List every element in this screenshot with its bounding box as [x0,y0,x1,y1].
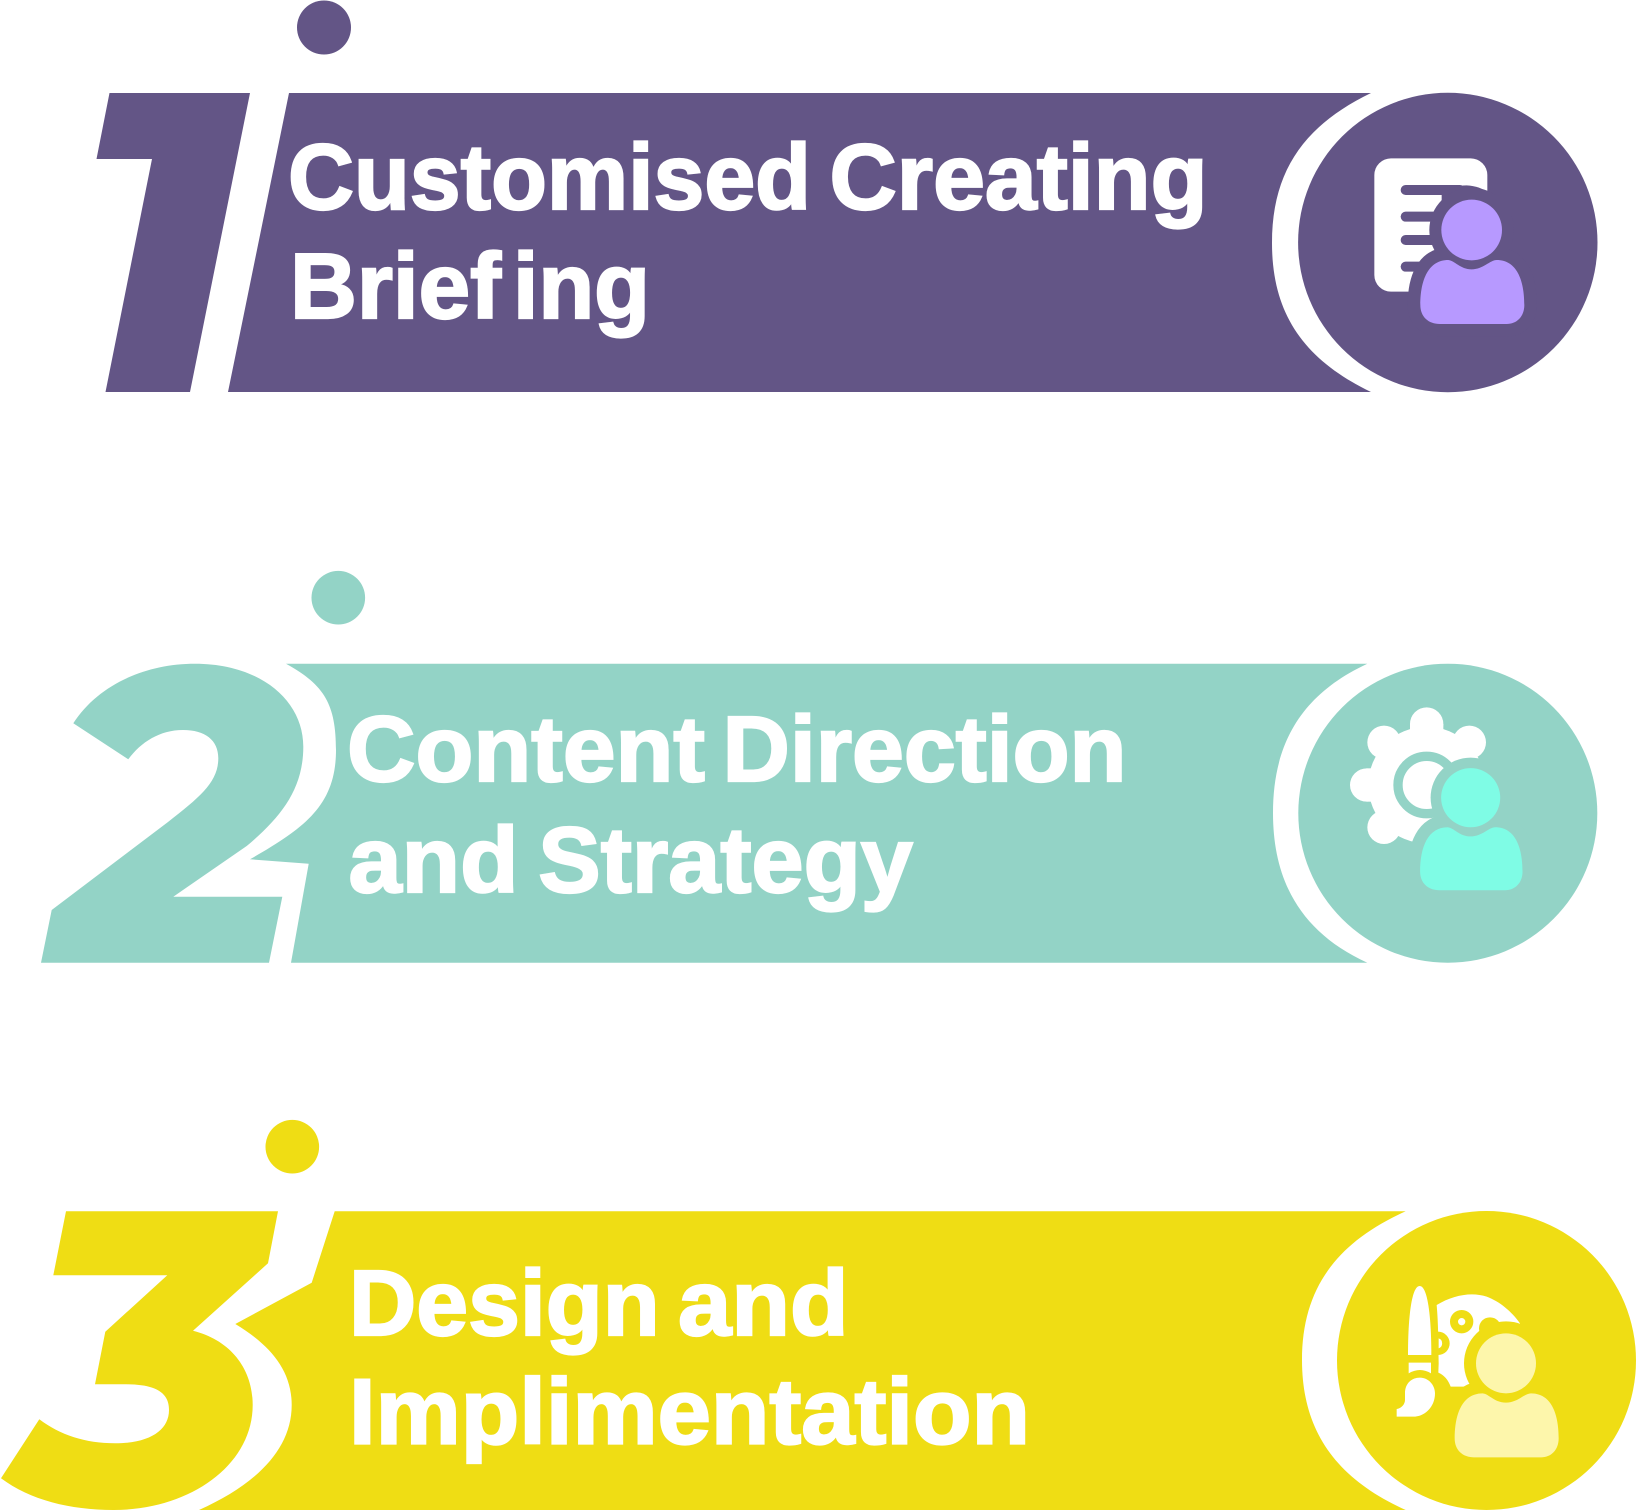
step 2 heading: Direction [722,697,1126,801]
step 2 heading: Strategy [538,808,913,912]
step 1 circle [1298,93,1598,392]
icon: brush and palette with person [1397,1286,1559,1457]
step 3 heading: and [678,1251,849,1355]
step 2 banner [250,664,1367,963]
step 1 [96,0,1598,392]
step 3 heading: Implimentation [349,1360,1030,1464]
step 1 dot [297,0,351,54]
step 2 heading: Content [347,697,705,801]
step 3 heading: Design [349,1251,660,1355]
step 1 heading: ing [513,234,650,338]
step 3 [1,1120,1636,1510]
step 3 numeral [1,1211,278,1510]
step 2 dot [312,571,365,624]
step 3 heading [349,1251,1030,1464]
step 3 circle [1337,1211,1636,1510]
step 2 heading [347,697,1126,912]
step 1 heading [288,125,1208,338]
step 1 numeral [96,93,250,392]
step 1 banner [228,93,1371,392]
icon: document with person [1374,158,1524,324]
icon: gear with person [1350,707,1523,890]
step 3 banner [199,1211,1406,1510]
step 3 dot [266,1120,319,1173]
step 2 numeral [41,664,303,963]
step 2 heading: and [348,808,518,912]
step 1 heading: Brief [290,234,502,338]
step 1 heading: Creating [830,125,1208,229]
step 2 circle [1298,664,1597,963]
step 1 heading: Customised [288,125,811,229]
step 2 [41,571,1597,963]
